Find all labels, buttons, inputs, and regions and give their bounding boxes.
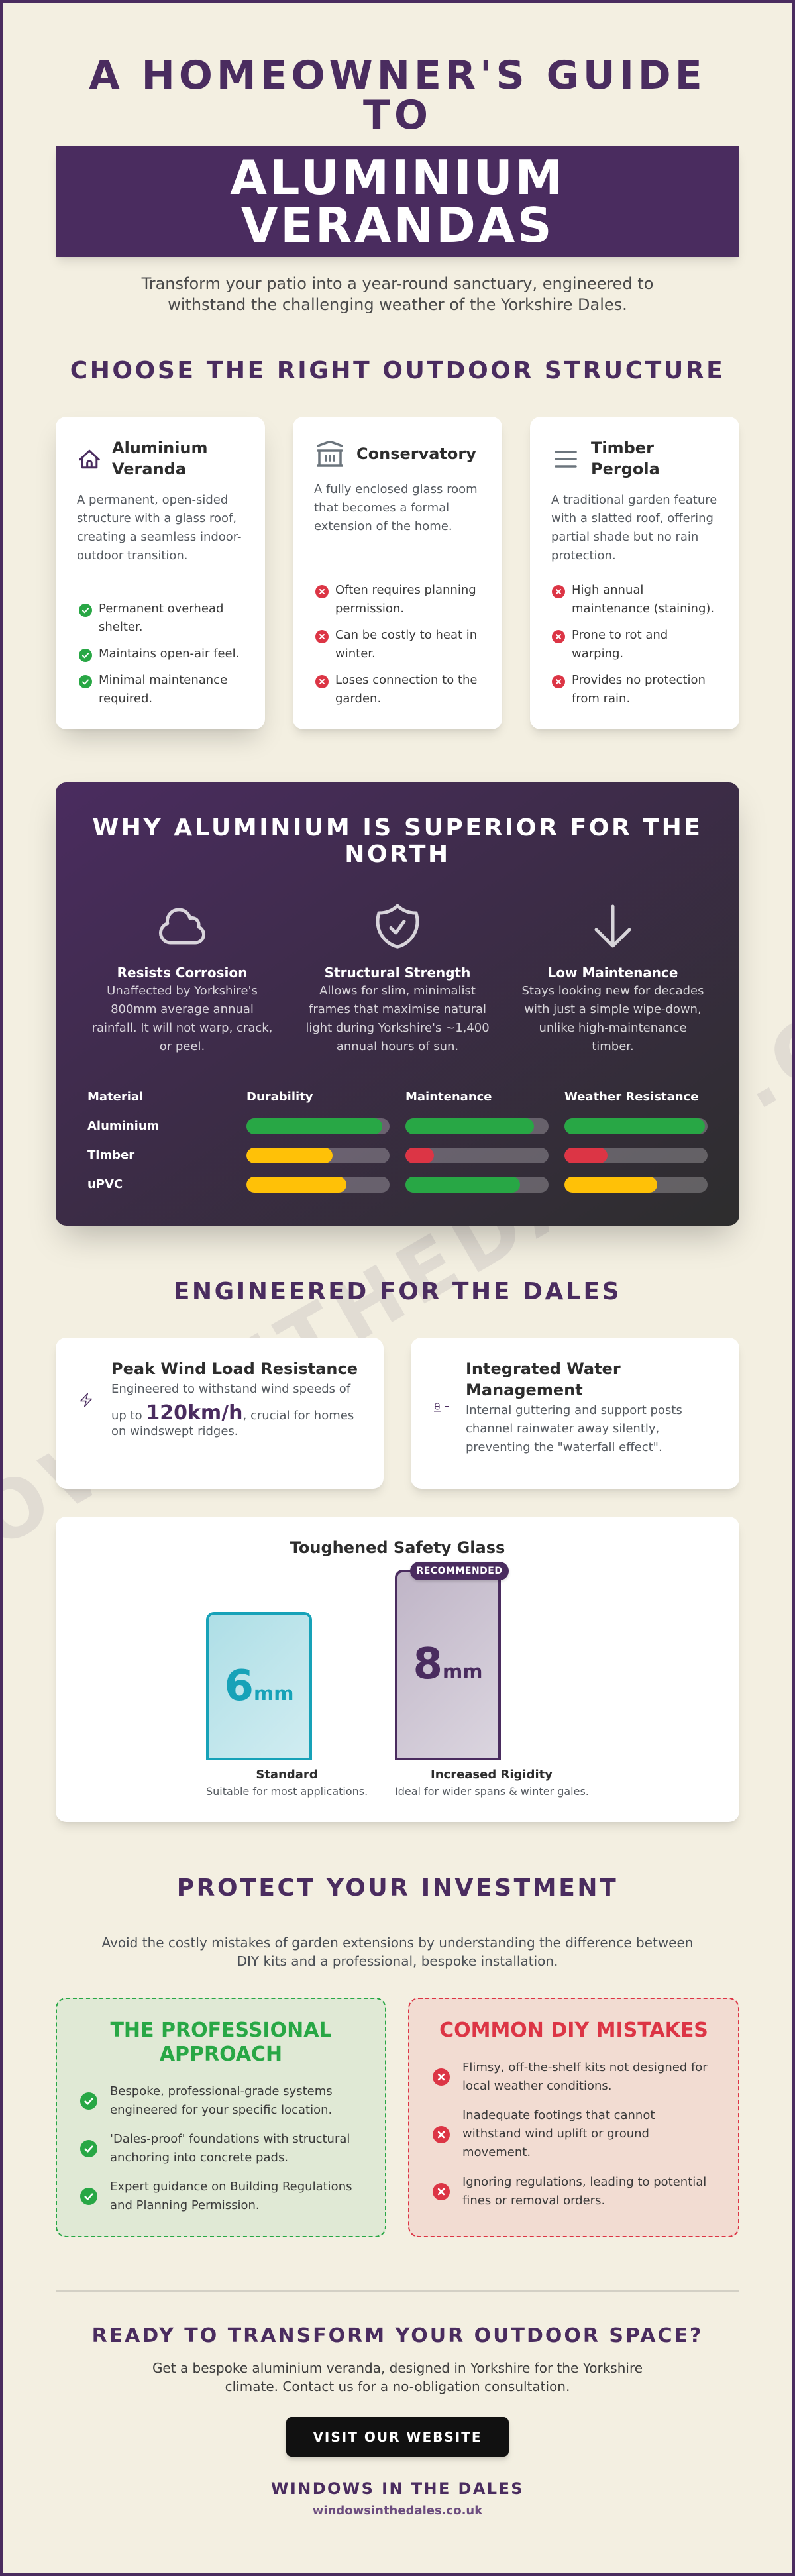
card title: Timber bbox=[591, 439, 654, 457]
item text bbox=[462, 2106, 655, 2162]
title: A HOMEOWNER'S GUIDE bbox=[89, 52, 706, 99]
item text: Inadequate footings that cannot bbox=[462, 2108, 655, 2122]
heading: choose structure: CHOOSE THE RIGHT OUTDOOR STRUCTURE bbox=[70, 357, 725, 384]
pro text: Maintains open-air feel. bbox=[99, 647, 239, 661]
company name: WINDOWS IN THE DALES bbox=[271, 2479, 524, 2498]
cta text: climate. Contact us for a no-obligation consultation. bbox=[225, 2379, 570, 2394]
value: 8mm: 8mm bbox=[413, 1640, 482, 1689]
bar: timber durability bbox=[246, 1148, 390, 1163]
card title bbox=[112, 439, 208, 478]
item text: Flimsy, off-the-shelf kits not designed for bbox=[462, 2061, 708, 2074]
heading: engineered: ENGINEERED FOR THE DALES bbox=[174, 1278, 621, 1305]
description: A traditional garden feature bbox=[551, 493, 717, 507]
icon: check bbox=[79, 649, 92, 662]
item text bbox=[110, 2082, 333, 2120]
item text: Expert guidance on Building Regulations bbox=[110, 2180, 352, 2194]
badge: recommended bbox=[410, 1562, 509, 1580]
intro text bbox=[56, 1933, 739, 1970]
feature title: Resists Corrosion bbox=[117, 965, 247, 981]
con text bbox=[335, 628, 477, 661]
panel heading bbox=[92, 814, 702, 868]
card title: Peak Wind Load Resistance bbox=[111, 1360, 358, 1378]
icon: check bbox=[79, 675, 92, 688]
cta heading: READY TO TRANSFORM YOUR OUTDOOR SPACE? bbox=[92, 2324, 703, 2347]
feature text: 800mm average annual bbox=[111, 1002, 254, 1016]
card title: Integrated Water bbox=[466, 1360, 621, 1378]
feature text: frames that maximise natural bbox=[309, 1002, 486, 1016]
con text bbox=[335, 673, 478, 706]
con text: warping. bbox=[572, 647, 623, 661]
con text: Can be costly to heat in bbox=[335, 628, 477, 642]
icon: check bbox=[80, 2188, 97, 2205]
description: extension of the home. bbox=[314, 519, 452, 533]
panel heading: WHY ALUMINIUM IS SUPERIOR FOR THE bbox=[92, 814, 702, 841]
stat line: up to 120km/h, crucial for homes bbox=[111, 1401, 354, 1424]
description: that becomes a formal bbox=[314, 501, 449, 515]
feature text: timber. bbox=[592, 1040, 634, 1053]
feature text: light during Yorkshire's ~1,400 bbox=[305, 1021, 490, 1035]
icon: slats bbox=[555, 451, 577, 468]
panel: why aluminium bbox=[56, 782, 739, 1226]
item text: fines or removal orders. bbox=[462, 2194, 605, 2208]
subtitle bbox=[142, 274, 653, 314]
item text: movement. bbox=[462, 2145, 531, 2159]
con text bbox=[335, 583, 476, 616]
con text: Prone to rot and bbox=[572, 628, 668, 642]
cta text: Get a bespoke aluminium veranda, designed in Yorkshire for the Yorkshire bbox=[152, 2360, 643, 2376]
bar: aluminium maintenance bbox=[405, 1118, 549, 1134]
table header: Material bbox=[87, 1090, 143, 1104]
description bbox=[77, 493, 242, 563]
feature text bbox=[92, 984, 272, 1053]
table header: Weather Resistance bbox=[564, 1090, 698, 1104]
panel: professional approach bbox=[56, 1998, 386, 2237]
panel: aluminium veranda bbox=[56, 417, 265, 729]
panel heading: NORTH bbox=[344, 841, 450, 868]
description: creating a seamless indoor- bbox=[77, 530, 242, 544]
description bbox=[551, 493, 717, 563]
panel heading: THE PROFESSIONAL bbox=[110, 2019, 332, 2042]
title: TO bbox=[363, 92, 432, 138]
bar: timber weather bbox=[564, 1148, 708, 1163]
icon: house bbox=[79, 449, 100, 469]
panel: timber pergola bbox=[530, 417, 739, 729]
item text: local weather conditions. bbox=[462, 2079, 611, 2093]
description: preventing the "waterfall effect". bbox=[466, 1440, 662, 1454]
title banner: ALUMINIUM bbox=[230, 150, 565, 205]
subtitle: withstand the challenging weather of the Yorkshire Dales. bbox=[168, 295, 627, 314]
intro text: Avoid the costly mistakes of garden extensions by understanding the difference between bbox=[102, 1935, 693, 1951]
caption: standard: Suitable for most applications. bbox=[206, 1785, 368, 1798]
con text bbox=[572, 628, 668, 661]
description bbox=[466, 1403, 682, 1454]
panel heading: APPROACH bbox=[160, 2043, 282, 2066]
feature text: Unaffected by Yorkshire's bbox=[107, 984, 258, 998]
card title: Aluminium bbox=[112, 439, 208, 457]
icon: cross bbox=[552, 585, 565, 598]
bar: aluminium durability bbox=[246, 1118, 390, 1134]
bar: upvc durability bbox=[246, 1177, 390, 1193]
icon: check bbox=[80, 2092, 97, 2110]
icon: building bbox=[317, 441, 343, 467]
card title bbox=[466, 1360, 621, 1399]
intro text: DIY kits and a professional, bespoke installation. bbox=[237, 1953, 558, 1969]
icon: cross bbox=[433, 2068, 450, 2086]
feature text: Stays looking new for decades bbox=[522, 984, 704, 998]
panel heading: COMMON DIY MISTAKES bbox=[439, 2019, 708, 2042]
card title: Pergola bbox=[591, 460, 660, 478]
item text: withstand wind uplift or ground bbox=[462, 2127, 649, 2141]
con text: permission. bbox=[335, 602, 404, 616]
feature title: Structural Strength bbox=[325, 965, 470, 981]
description: partial shade but no rain bbox=[551, 530, 698, 544]
item text: 'Dales-proof' foundations with structural bbox=[110, 2132, 350, 2146]
item text: engineered for your specific location. bbox=[110, 2103, 332, 2117]
button: VISIT OUR WEBSITE bbox=[313, 2429, 482, 2445]
con text: maintenance (staining). bbox=[572, 602, 714, 616]
description: channel rainwater away silently, bbox=[466, 1422, 659, 1436]
feature text: Allows for slim, minimalist bbox=[319, 984, 476, 998]
caption: increased rigidity: Ideal for wider spans & winter gales. bbox=[395, 1785, 589, 1798]
pro text: shelter. bbox=[99, 620, 142, 634]
icon: cloud bbox=[159, 908, 205, 945]
bar: timber maintenance bbox=[405, 1148, 549, 1163]
icon: cross bbox=[552, 675, 565, 688]
title bbox=[89, 52, 706, 138]
panel: safety glass bbox=[56, 1517, 739, 1822]
icon: bolt bbox=[80, 1393, 92, 1407]
con text: winter. bbox=[335, 647, 376, 661]
description bbox=[314, 482, 478, 533]
con text: Loses connection to the bbox=[335, 673, 478, 687]
item text bbox=[110, 2178, 352, 2215]
label: increased rigidity: Increased Rigidity bbox=[431, 1768, 553, 1782]
con text: garden. bbox=[335, 692, 381, 706]
card title bbox=[591, 439, 660, 478]
row label: Timber bbox=[87, 1148, 134, 1162]
pro text bbox=[99, 673, 227, 706]
description: A permanent, open-sided bbox=[77, 493, 228, 507]
bar: upvc maintenance bbox=[405, 1177, 549, 1193]
title banner: VERANDAS bbox=[241, 197, 554, 253]
panel heading bbox=[56, 2019, 386, 2066]
website: windowsinthedales.co.uk bbox=[313, 2504, 482, 2518]
icon: check bbox=[80, 2140, 97, 2157]
con text: Often requires planning bbox=[335, 583, 476, 597]
panel: water management bbox=[411, 1338, 739, 1489]
panel: conservatory bbox=[293, 417, 502, 729]
panel: diy mistakes bbox=[408, 1998, 739, 2237]
card title: Veranda bbox=[112, 460, 186, 478]
description: protection. bbox=[551, 549, 616, 563]
bar: aluminium weather bbox=[564, 1118, 708, 1134]
con text: from rain. bbox=[572, 692, 630, 706]
description: outdoor transition. bbox=[77, 549, 188, 563]
icon: cross bbox=[315, 675, 329, 688]
pro text: required. bbox=[99, 692, 152, 706]
table header: Durability bbox=[246, 1090, 313, 1104]
item text bbox=[110, 2130, 350, 2167]
item text: anchoring into concrete pads. bbox=[110, 2151, 288, 2165]
pro text bbox=[99, 602, 223, 634]
chart title: Toughened Safety Glass bbox=[290, 1538, 505, 1557]
item text: Ignoring regulations, leading to potential bbox=[462, 2175, 706, 2189]
description: Engineered to withstand wind speeds of bbox=[111, 1382, 350, 1396]
description: Internal guttering and support posts bbox=[466, 1403, 682, 1417]
panel: wind load bbox=[56, 1338, 384, 1489]
con text bbox=[572, 583, 714, 616]
item text: Bespoke, professional-grade systems bbox=[110, 2084, 333, 2098]
icon: water bbox=[434, 1403, 449, 1411]
icon: cross bbox=[552, 630, 565, 643]
feature text bbox=[522, 984, 704, 1053]
feature title: Low Maintenance bbox=[548, 965, 678, 981]
icon: cross bbox=[315, 630, 329, 643]
button bbox=[286, 2417, 509, 2457]
title banner bbox=[56, 146, 739, 257]
icon: arrow down bbox=[595, 905, 631, 947]
badge: recommended: RECOMMENDED bbox=[417, 1566, 502, 1576]
icon: shield bbox=[376, 904, 419, 949]
icon: cross bbox=[433, 2126, 450, 2143]
subtitle: Transform your patio into a year-round sanctuary, engineered to bbox=[142, 274, 653, 293]
feature text bbox=[305, 984, 490, 1053]
card title: Conservatory bbox=[356, 445, 476, 463]
description: structure with a glass roof, bbox=[77, 511, 237, 525]
feature text: annual hours of sun. bbox=[337, 1040, 458, 1053]
glass: 8mm bbox=[395, 1570, 501, 1760]
value: 6mm: 6mm bbox=[225, 1662, 293, 1711]
table header: Maintenance bbox=[405, 1090, 492, 1104]
feature text: with just a simple wipe-down, bbox=[524, 1002, 702, 1016]
con text: Provides no protection bbox=[572, 673, 706, 687]
feature text: rainfall. It will not warp, crack, bbox=[92, 1021, 272, 1035]
glass: 6mm bbox=[206, 1612, 312, 1760]
icon: check bbox=[79, 604, 92, 617]
heading: protect: PROTECT YOUR INVESTMENT bbox=[177, 1874, 618, 1902]
description: with a slatted roof, offering bbox=[551, 511, 714, 525]
bar: upvc weather bbox=[564, 1177, 708, 1193]
pro text: Minimal maintenance bbox=[99, 673, 227, 687]
item text bbox=[462, 2173, 706, 2210]
icon: cross bbox=[433, 2183, 450, 2200]
cta text bbox=[56, 2359, 739, 2396]
item text: and Planning Permission. bbox=[110, 2198, 260, 2212]
con text bbox=[572, 673, 706, 706]
description: A fully enclosed glass room bbox=[314, 482, 478, 496]
row label: Aluminium bbox=[87, 1119, 159, 1133]
icon: cross bbox=[315, 585, 329, 598]
feature text: or peel. bbox=[160, 1040, 205, 1053]
pro text: Permanent overhead bbox=[99, 602, 223, 616]
item text bbox=[462, 2059, 708, 2096]
row label: uPVC bbox=[87, 1177, 123, 1191]
description: on windswept ridges. bbox=[111, 1424, 238, 1438]
feature text: unlike high-maintenance bbox=[539, 1021, 687, 1035]
con text: High annual bbox=[572, 583, 643, 597]
label: standard: Standard bbox=[256, 1768, 318, 1782]
card title: Management bbox=[466, 1381, 583, 1399]
